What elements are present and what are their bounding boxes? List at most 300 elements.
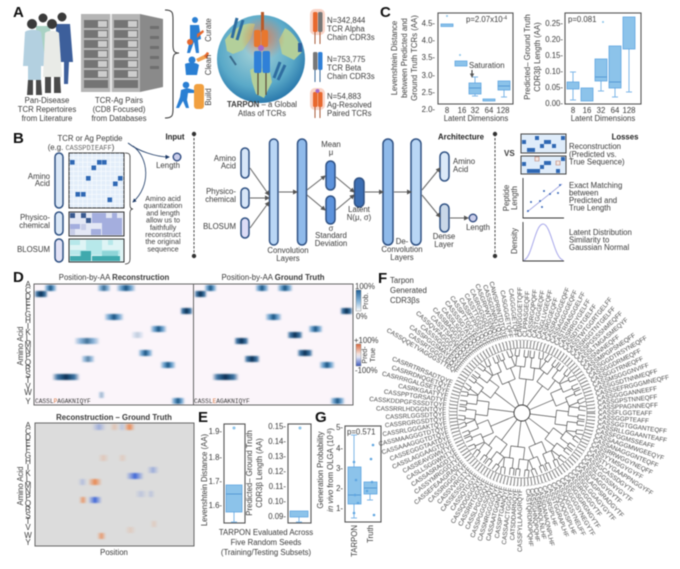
panel label A: A <box>13 4 24 21</box>
text: TCR-Ag pairs: TCR-Ag Pairs <box>95 96 143 105</box>
chart: OLGA boxplot: 3- <box>336 464 343 473</box>
ring of terminal nodes <box>449 340 595 486</box>
sequence labels: upper right: CAWGGGETQFF <box>517 287 524 337</box>
sequence labels: lower left: CASSAACTGGGYF <box>501 488 515 545</box>
heatmap: reconstruction minus truth <box>35 423 194 546</box>
sequence labels: upper right: CASSGGGANNEEFF <box>596 385 658 402</box>
axis: amino acids top: T <box>26 376 31 385</box>
sequence labels: lower left: CATSDDARNQYF <box>509 488 519 541</box>
text: quantization note: the original <box>145 237 181 246</box>
text: paired count: Paired TCRs <box>327 109 372 118</box>
panel: F phylogeny <box>369 270 670 552</box>
sequence labels: lower right: CASSRGGGGYTF <box>566 471 603 518</box>
chart: Levenshtein seeds: 1.8- <box>209 453 222 462</box>
sequence labels: upper right: CASGLLVGEQFF <box>536 289 555 340</box>
panel: G generation probability <box>315 409 381 557</box>
text: input labels: Acid <box>221 162 236 170</box>
text: length: Length <box>156 161 180 170</box>
legend: difference: +100% <box>354 336 379 345</box>
text: quantization note: Amino acid <box>145 194 181 203</box>
icon: paired TCR <box>310 88 325 118</box>
sequence labels: upper right: CASSGGDRMEQFF <box>587 348 643 380</box>
chart: circular dendrogram <box>369 281 670 552</box>
chart: Levenshtein distance boxplot: 32 <box>471 106 479 115</box>
legend: probability: Prob. <box>363 293 370 309</box>
axis: amino acids top: I <box>27 322 29 331</box>
sequence labels: lower right: CASRMNQLNLHF <box>532 487 547 540</box>
text: latent distribution: Similarity to <box>569 236 610 244</box>
text: quantization note: allow us to <box>146 216 180 225</box>
sequence labels: upper left: CASSRTGGGYEQYF <box>407 332 462 372</box>
text: TCR-Ag pairs: (CD8 Focused) <box>93 105 146 114</box>
text: quantization note: faithfully <box>150 223 177 232</box>
icon: output length node <box>469 214 477 222</box>
sequence labels: lower right: CASSRRWGGYNEQFF <box>590 441 654 477</box>
text: channel labels: Amino <box>28 172 51 181</box>
sequence labels: upper left <box>385 281 519 376</box>
heading: ground truth: Position-by-AA Ground Truth <box>221 273 325 282</box>
axis: amino acids bottom: N <box>25 487 31 496</box>
text: input labels: Amino <box>214 154 237 163</box>
chart: Levenshtein distance boxplot: Levenshtein Distance <box>390 21 399 95</box>
sequence labels: lower left: CASSYMRGGDTYF <box>413 455 463 496</box>
legend: probability: 0% <box>356 312 367 321</box>
text: beta count: N=753,775 <box>327 55 366 64</box>
sequence labels: lower right: CASSGGPTEAFF <box>598 414 649 425</box>
chart: length difference boxplot: 0.05- <box>545 83 563 92</box>
chart: length seeds: 0.12- <box>268 467 286 476</box>
panel label D: D <box>13 269 24 286</box>
heading: TCR or Ag peptide: (e.g. CASSPDIEAFF) <box>48 143 114 153</box>
sequence labels: upper right: CASSRGGTNTGELFF <box>569 305 617 358</box>
text: layer labels: De- <box>396 237 409 246</box>
heading: input: Input <box>165 132 185 142</box>
sequence labels: lower right: CASSAAGGMWGEEQYF <box>593 432 665 462</box>
chart: length seeds <box>245 422 311 523</box>
chart: OLGA boxplot: in vivo from OLGA (10 <box>326 435 335 512</box>
text: quantization note: quantization <box>144 201 182 210</box>
chart: length difference boxplot: 64 <box>611 106 620 115</box>
chart: length difference boxplot <box>523 13 641 123</box>
text: layer labels: Layers <box>276 254 300 263</box>
sequence labels: lower right: CASSRSPLHF <box>540 485 558 527</box>
sequence labels: upper right: CASSPPAGNNEQFF <box>598 402 658 412</box>
sequence labels: lower left: CASSPPTGRSADTYF <box>383 389 448 404</box>
sequence labels: upper left: CASSFFPPSTQYF <box>457 297 490 348</box>
text: input labels: BLOSUM <box>203 222 236 231</box>
axis: amino acids top: N <box>25 346 31 355</box>
sequence labels: upper left: CASGGGETQFF <box>498 290 514 339</box>
panel: D heatmaps <box>13 269 379 557</box>
text: latent distribution: Latent Distribution <box>569 228 632 237</box>
sequence labels: upper right: CASSTWTGGRTGELFF <box>565 296 614 355</box>
grid: physicochemical <box>69 212 124 236</box>
chart: Levenshtein distance boxplot: 64 <box>485 106 494 115</box>
chart: OLGA boxplot: -8 <box>327 431 333 435</box>
sequence labels: upper right: CASSRAGGGEQFF <box>545 287 572 343</box>
sequence labels: lower left: CASSESSGTTYF <box>439 469 476 513</box>
frame: top heatmaps <box>34 284 353 405</box>
text: alpha count: Chain CDR3s <box>327 33 375 42</box>
heatmap: reconstruction: CASSLPAGAKNIQYF <box>35 398 91 405</box>
sequence labels: lower left: CASSPGGGSGQYF <box>469 482 497 539</box>
text: channel labels: Acid <box>35 179 50 188</box>
chart: length difference boxplot: 0.25- <box>545 19 563 28</box>
axis: amino acids bottom: H <box>25 457 31 466</box>
text: TARPON caption: Atlas of TCRs <box>238 109 286 118</box>
sequence labels: lower left: CASRRTRRSADTQYF <box>391 356 454 386</box>
axis: amino acids bottom: Y <box>25 538 31 547</box>
chart: Levenshtein distance boxplot: Saturation <box>469 61 505 70</box>
chart: Levenshtein distance boxplot: Latent Dimensions <box>444 114 508 123</box>
sequence labels: lower right <box>524 409 668 547</box>
sequence labels: lower right: CASSANAGGGNTEQFF <box>592 437 659 470</box>
axis: amino acids top: W <box>24 388 32 397</box>
panel label C: C <box>380 4 391 21</box>
axis: amino acids bottom: S <box>25 511 31 520</box>
chart: length difference boxplot: 128 <box>622 106 636 115</box>
text: layer labels: Length <box>466 223 490 232</box>
axis: amino acids top: Y <box>25 397 31 406</box>
chart: Levenshtein distance boxplot: 3.5- <box>422 53 435 62</box>
chart: length scatter <box>502 178 564 218</box>
axis: amino acids top: P <box>25 352 31 361</box>
panel label B: B <box>13 130 24 147</box>
axis: amino acids bottom: F <box>26 445 31 454</box>
sequence labels: upper left: CASSBAGGSYEQYF <box>431 306 476 357</box>
chart: Levenshtein distance boxplot: -4 <box>503 16 507 22</box>
axis: amino acids bottom: L <box>26 475 31 484</box>
sequence labels: upper right: CASSLTMGASMEQYF <box>576 317 630 365</box>
sequence labels: lower left: CASLLSGGWNTYF <box>405 447 458 482</box>
axis: amino acids bottom: D <box>25 433 31 442</box>
layers: encoder and decoder <box>241 139 449 245</box>
text: quantization note: and length <box>146 208 180 217</box>
text: reconstruction: Reconstruction <box>569 142 621 151</box>
sequence labels: upper right: CASSNNNEQFF <box>579 334 621 368</box>
sequence labels: lower right: CASSQDQGSPLHF <box>549 481 577 536</box>
divider: architecture to losses <box>493 132 497 258</box>
sequence labels: upper left: CASRGGSGDTQYF <box>468 288 497 344</box>
text: evaluation caption: TARPON Evaluated Across <box>219 528 313 537</box>
text: reconstruction: True Sequence) <box>569 158 625 166</box>
sequence labels: upper right: CASSMSGGGNVIFF <box>592 362 650 389</box>
text: layer labels: Layers <box>390 253 414 262</box>
axis: amino acids top: V <box>25 382 31 391</box>
legend: difference <box>354 336 379 375</box>
sequence labels: upper right: CASSGPSTNNEQFF <box>597 394 658 407</box>
sequence labels: lower left: CASSQDGGGQYF <box>450 475 484 525</box>
sequence labels: lower right: CASSFLGGTEAFF <box>598 409 652 417</box>
chart: length seeds: 0.14- <box>268 437 286 446</box>
text: reconstruction: (Predicted vs. <box>569 150 617 159</box>
chart: OLGA boxplot: p=0.571 <box>347 428 375 436</box>
icon: build figure <box>176 82 204 109</box>
sequence labels: lower left: CASSNRGGGGQYF <box>477 484 501 542</box>
chart: OLGA boxplot: 1- <box>336 504 343 513</box>
chart: OLGA boxplot: Generation Probability <box>316 431 325 509</box>
chart: length difference boxplot: CDR3β Length (AA) <box>533 22 542 92</box>
chart: length difference boxplot: 8 <box>571 106 575 115</box>
sequence labels: lower right: CASSGCASSDGYTF <box>582 454 636 495</box>
sequence labels: lower right: CASSGHNQPQHF <box>528 488 541 542</box>
text: layer labels: N(μ, σ) <box>347 213 372 222</box>
chart: Levenshtein seeds: 1.7- <box>209 477 222 486</box>
chart: Levenshtein distance boxplot: 128 <box>496 106 510 115</box>
panel: C latent dimension charts <box>380 4 641 123</box>
axis: amino acids bottom: Amino Acid <box>16 466 25 506</box>
axis: amino acids bottom <box>16 421 32 547</box>
sequence labels: lower left: CASSQTGGYF <box>449 472 480 512</box>
text: paired count: Ag-Resolved <box>327 100 372 110</box>
text: paired count: N=54,883 <box>327 92 361 101</box>
sequence labels: lower right: CASTQRDNOPQHF <box>524 489 534 547</box>
icon: server racks <box>81 14 163 92</box>
text: exact matching: between <box>569 188 598 198</box>
axis: amino acids bottom: P <box>25 493 31 502</box>
text: channel labels: Physico- <box>20 213 50 222</box>
panel: B input <box>13 130 185 264</box>
sequence labels: lower right: CASSGLGGAGYGYTF <box>569 468 617 523</box>
tree branches <box>458 349 586 477</box>
text: layer labels: Standard <box>315 231 347 240</box>
sequence labels: upper left: CAGGGGETQFF <box>507 288 519 338</box>
sequence labels: lower left: CASSRLGGSDTQYF <box>385 411 446 421</box>
legend: probability <box>355 282 375 321</box>
chart: OLGA boxplot: 4- <box>336 444 343 453</box>
pills: input channels <box>55 153 63 262</box>
text: beta count: TCR Beta <box>327 64 362 72</box>
axis: amino acids bottom: A <box>25 421 31 430</box>
sequence labels: lower left: CASSLPGGGQYF <box>464 480 492 531</box>
sequence labels: upper right: CASRGGEQFF <box>540 297 560 341</box>
chart: length scatter: Length <box>510 186 519 210</box>
chart: length difference boxplot: p=0.081 <box>568 15 596 24</box>
sequence labels: lower left: CASSVVRGTYF <box>436 466 473 506</box>
sequence labels: lower left: CASSEFEAAGRADYF <box>413 459 466 506</box>
sequence labels: upper left: CASSGDNRGTQYF <box>481 284 505 341</box>
text: channel labels: chemical <box>19 221 50 230</box>
legend: difference: -100% <box>355 366 378 375</box>
axis: amino acids top: H <box>25 316 31 325</box>
axis: amino acids bottom: W <box>24 531 32 540</box>
panel: B losses <box>502 132 639 261</box>
axis: amino acids bottom: E <box>25 439 31 448</box>
text: curate: Curate <box>204 18 213 42</box>
heading: difference map: Reconstruction – Ground Truth <box>56 413 172 422</box>
chart: Levenshtein distance boxplot: p=2.07x10 <box>466 15 503 24</box>
text: input labels: chemical <box>205 195 236 204</box>
chart: length difference boxplot: 0.20- <box>545 35 563 44</box>
grid: amino acid one-hot <box>69 153 124 208</box>
sequence labels: lower right: CASSGSGRGNGYTF <box>562 474 601 530</box>
sequence labels: upper left: CASSSSGTAYEQYF <box>443 300 483 352</box>
icon: curate figure <box>187 17 204 53</box>
sequence labels: lower right: CASSGGTGGANTEQFF <box>597 419 667 435</box>
text: exact matching: Exact Matching <box>569 181 622 190</box>
icon: curly brace <box>165 10 179 118</box>
text: TARPON caption: TARPON – a Global <box>227 100 297 109</box>
sequence labels: upper left: CASSQVFAGGGTEQYF <box>414 310 470 363</box>
sequence labels: upper right: CASSAGGGGEQFF <box>549 289 579 345</box>
text: panel F title: CDR3βs <box>390 296 420 305</box>
text: clean: Clean <box>204 55 213 75</box>
axis: amino acids bottom: G <box>25 451 31 460</box>
axis: amino acids top: F <box>26 304 31 313</box>
chart: OLGA boxplot: 5- <box>336 423 343 432</box>
grid: BLOSUM <box>69 239 124 262</box>
panel label E: E <box>198 409 208 426</box>
sequence labels: lower right: CASSTGGRAPLHF <box>545 483 570 538</box>
sequence labels: lower right: CASSDANAQNPLHF <box>536 486 555 547</box>
axis: amino acids top: G <box>25 310 31 319</box>
text: latent distribution: Gaussian Normal <box>569 243 629 252</box>
text: beta count: Chain CDR3s <box>327 72 375 81</box>
sequence labels: lower right: CASSFGGMSSEAFF <box>595 428 655 450</box>
text: quantization note: sequence <box>147 244 179 253</box>
sequence labels: upper left: CASSSGGGYEQYF <box>419 323 467 366</box>
heading: TCR or Ag peptide: TCR or Ag Peptide <box>57 134 123 143</box>
bracket: channels to note <box>125 153 133 264</box>
chart: length difference boxplot: Latent Dimensions <box>571 114 635 123</box>
panel label G: G <box>315 409 327 426</box>
text: evaluation caption: (Training/Testing Subsets) <box>221 548 312 557</box>
heading: losses: Losses <box>612 132 639 142</box>
sequence labels: lower right: CASSGAGGYGYTF <box>576 461 623 505</box>
sequence labels: lower right: CASSGGGSYNEGYTF <box>558 477 596 538</box>
text: layer labels: σ <box>329 224 334 233</box>
legend: difference: True <box>370 348 377 362</box>
axis: amino acids top <box>16 280 32 406</box>
sequence labels: upper left: CASSQQETVAGGGSTTEQF <box>385 327 460 376</box>
text: alpha count: N=342,844 <box>327 16 366 25</box>
panel: A data sources and atlas <box>13 4 375 123</box>
text: layer labels: Latent <box>348 205 371 214</box>
chart: Levenshtein distance boxplot: 16 <box>458 106 466 115</box>
text: alpha count: TCR Alpha <box>327 24 365 34</box>
sequence labels: upper left: CAWSPRINTDTQYF <box>487 281 509 340</box>
axis: amino acids bottom: Q <box>25 499 31 508</box>
sequence labels: lower left: CASSMAAGGGTDTQYF <box>378 425 449 448</box>
sequence labels: upper right <box>517 287 670 412</box>
axis: amino acids top: E <box>25 298 31 307</box>
sequence labels: lower left: CASSASRAGDTYF <box>410 451 460 488</box>
chart: length seeds: 0.13- <box>268 452 286 461</box>
sequence labels: lower right: CASSLAGPSRADGYTF <box>573 465 625 519</box>
chart: length seeds: 0.09- <box>268 512 286 521</box>
sequence labels: upper right: CASSDTGTGELFF <box>561 303 599 352</box>
axis: amino acids top: A <box>25 280 31 289</box>
text: layer labels: Layer <box>434 240 454 249</box>
text: evaluation caption: Five Random Seeds <box>231 538 301 547</box>
chart: OLGA boxplot <box>316 423 381 557</box>
icon: TCR alpha <box>310 9 325 44</box>
chart: length seeds: 0.15- <box>268 422 286 431</box>
sequence labels: lower left: CASSAATGGNQYF <box>485 485 506 542</box>
grid: predicted sequence <box>521 134 566 153</box>
chart: Levenshtein distance boxplot: 4.0- <box>422 36 435 45</box>
heatmap: ground truth: CASSLEAGAKNIQYF <box>194 398 250 405</box>
sequence labels: lower right: CASSQGGSYNEUFF <box>554 479 587 537</box>
text: panel F title: Generated <box>390 286 427 295</box>
text: layer labels: Convolution <box>381 245 423 254</box>
chart: Levenshtein distance boxplot <box>390 13 513 123</box>
sequence labels: lower left: CASSPTGANQYF <box>494 487 510 539</box>
divider: input to architecture <box>192 132 196 258</box>
text: output label: Acid <box>453 165 468 174</box>
sequence labels: lower left: CASRRDNQGETQYF <box>391 364 452 391</box>
panel label F: F <box>378 270 387 287</box>
text: output label: Amino <box>453 157 476 166</box>
chart: Levenshtein distance boxplot: 4.5- <box>422 19 435 28</box>
text: quantization note: reconstruct <box>145 230 181 239</box>
axis: amino acids top: S <box>25 370 31 379</box>
sequence labels: upper left: CASGRPWTGNIQYF <box>473 283 501 342</box>
axis: amino acids top: M <box>25 340 32 349</box>
chart: length difference boxplot: 0.15- <box>545 51 563 60</box>
axis: amino acids bottom: M <box>25 481 32 490</box>
sequence labels: upper left: CASSTSAGGEQYF <box>429 314 473 360</box>
sequence labels: lower left: CASSAAAGGGTDTQYF <box>381 430 450 456</box>
axis: amino acids bottom: T <box>26 517 31 526</box>
legend: probability: 100% <box>355 282 375 291</box>
axis: amino acids top: Amino Acid <box>16 326 25 366</box>
axis: amino acids top: C <box>25 286 31 295</box>
chart: Levenshtein seeds <box>200 424 245 526</box>
chart: OLGA boxplot: Truth <box>366 525 375 543</box>
panel: E seed evaluation <box>198 409 313 557</box>
chart: length seeds: Predicted– Ground Truth <box>245 430 254 516</box>
heading: reconstruction: Position-by-AA Reconstruction <box>59 273 169 282</box>
text: layer labels: Deviation <box>315 239 347 248</box>
panel: B architecture <box>203 132 490 263</box>
heatmap: reconstruction <box>34 284 193 405</box>
axis: amino acids bottom: K <box>25 469 31 478</box>
sequence labels: lower left: CASSEAVGWNTYF <box>402 443 455 475</box>
sequence labels: upper left: CASSPGGSMAYEQYF <box>408 324 464 369</box>
chart: Levenshtein distance boxplot: 3.0- <box>422 71 435 80</box>
sequence labels: lower left: CASSRGRGSDTQYF <box>385 416 447 429</box>
sequence labels: upper right: CLPPASGEQFF <box>522 291 531 337</box>
sequence labels: upper right: CASTRRASGGELFF <box>553 291 587 347</box>
chart: length difference boxplot: 16 <box>583 106 591 115</box>
chart: OLGA boxplot: 2- <box>336 484 343 493</box>
globe <box>217 12 305 103</box>
chart: Levenshtein distance boxplot: between Predicted and <box>400 18 409 98</box>
sequence labels: lower left: CASSEGGGTAATDYF <box>389 434 451 463</box>
sequence labels: lower left: CASSFYLLAAGRQYF <box>517 489 524 552</box>
sequence labels: upper right: CASSRRGYGELFF <box>557 298 593 349</box>
text: exact matching: Predicted and <box>569 196 617 205</box>
icon: length node <box>173 153 181 161</box>
grid: true sequence <box>521 156 566 174</box>
text: build: Build <box>204 88 213 106</box>
sequence labels: upper left: CASSPTTGGYEQYF <box>448 295 486 350</box>
chart: length seeds: CDR3β Length (AA) <box>255 438 264 508</box>
chart: length difference boxplot: 0.00- <box>545 99 563 108</box>
sequence labels: lower left: CASSRGGGYTYF <box>427 463 469 504</box>
heatmap: ground truth <box>194 284 353 405</box>
text: pan-disease repertoires: from Literature <box>22 114 72 123</box>
chart: Levenshtein seeds: 1.9- <box>209 427 222 436</box>
text: exact matching: True Length <box>569 204 611 212</box>
axis: amino acids top: K <box>25 328 31 337</box>
chart: length seeds: 0.11- <box>269 482 286 491</box>
legend: difference: Pred- <box>362 346 369 364</box>
sequence labels: upper right: CASSPGSSSNMEQFF <box>573 310 624 361</box>
sequence labels: upper right: CASTGGGEQFF <box>531 290 547 339</box>
sequence labels: upper right: CASSGGDTRSYNEQFF <box>585 335 649 376</box>
